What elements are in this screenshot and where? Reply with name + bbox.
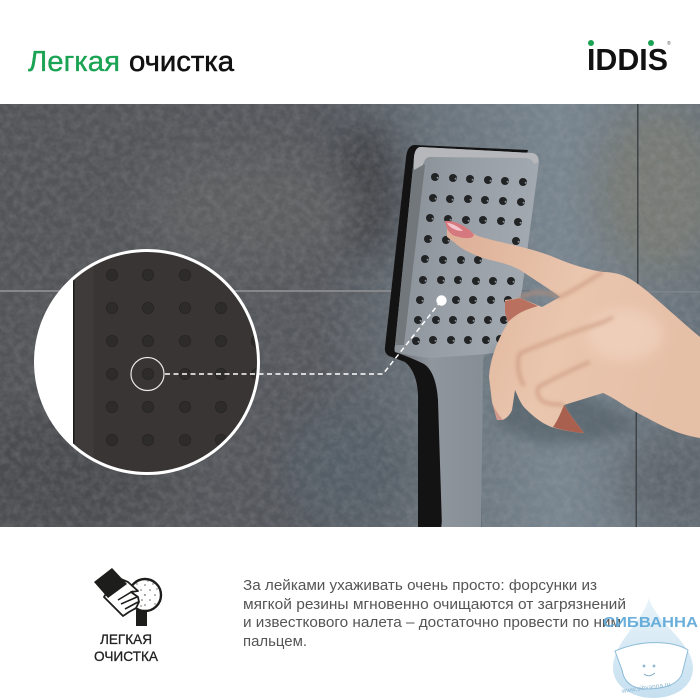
shower head [385, 145, 539, 527]
hand shadow [495, 345, 640, 445]
watermark bathtub [615, 643, 688, 689]
tile joints [0, 104, 700, 527]
wall background [0, 104, 700, 530]
icon label [94, 631, 159, 664]
logo: IDDIS: ® [667, 40, 671, 47]
shower handle [395, 350, 487, 527]
icon hand [104, 577, 139, 616]
icon label: ОЧИСТКА [94, 648, 159, 664]
watermark url: www.sibvanna.ru [620, 681, 671, 695]
magnifier lens [34, 249, 260, 475]
description text: и известкового налета – достаточно провести по ним [243, 614, 621, 631]
title [28, 46, 234, 78]
shower left bevel [395, 157, 425, 345]
icon: hand cleaning shower head [94, 568, 161, 626]
icon fingers [118, 591, 138, 609]
title: очистка [129, 46, 234, 78]
nozzles [412, 173, 527, 345]
description text: мягкой резины мгновенно очищаются от загрязнений [243, 596, 626, 613]
title: Легкая [28, 46, 120, 78]
icon cuff [94, 568, 127, 598]
watermark drop [613, 598, 693, 698]
description text [243, 577, 626, 650]
icon shower head [129, 579, 161, 626]
lens content [37, 252, 257, 472]
watermark name: СИБВАННА [603, 615, 699, 631]
hand skin [447, 222, 700, 438]
watermark bathtub face [643, 665, 655, 676]
small focus ring [131, 358, 164, 390]
finger creases [518, 272, 613, 405]
icon label: ЛЕГКАЯ [100, 631, 152, 647]
hand highlight [590, 310, 662, 360]
lens nozzles [106, 269, 263, 446]
shower top bevel [414, 147, 538, 170]
shower face [394, 147, 539, 358]
description text: За лейками ухаживать очень просто: форсунки из [243, 577, 597, 594]
description text: пальцем. [243, 633, 307, 650]
finger nails [445, 221, 584, 433]
shower back edge [385, 145, 528, 527]
callout point [436, 295, 447, 306]
photo panel: shower head and hand [0, 104, 700, 530]
lens ring [36, 250, 258, 474]
watermark: sibvanna [603, 598, 699, 698]
logo: IDDIS: IDDIS [587, 42, 668, 77]
dashed callout leader [259, 304, 439, 375]
hand [445, 221, 700, 438]
